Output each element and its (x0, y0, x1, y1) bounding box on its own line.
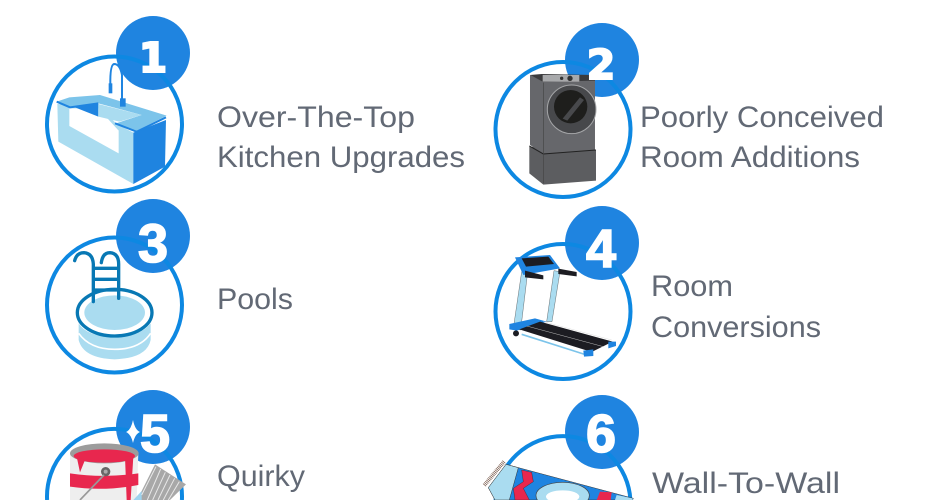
number badge 6 (565, 395, 639, 469)
label 1: Kitchen Upgrades (217, 141, 465, 174)
label 5: Quirky (217, 460, 305, 493)
ring 4 (496, 244, 630, 379)
numeral 1: 1 (139, 34, 167, 82)
item 5: quirky (47, 390, 305, 500)
icon: treadmill (509, 255, 616, 357)
number badge 1 (116, 16, 190, 90)
item 2: room additions (496, 23, 884, 197)
label 2 (640, 101, 884, 174)
ring 1 (47, 56, 182, 192)
icon: patterned rug (484, 462, 633, 500)
label 2: Room Additions (640, 141, 860, 174)
label 4: Room (651, 270, 733, 303)
ring 5 (47, 429, 182, 500)
icon: pool with ladder (75, 253, 152, 359)
numeral 5: 5 (140, 404, 170, 464)
label 1: Over-The-Top (217, 101, 415, 134)
item 3: pools (47, 199, 293, 372)
numeral 6: 6 (586, 404, 616, 464)
numeral 4: 4 (586, 219, 616, 279)
item 4: room conversions (496, 206, 821, 379)
ring 6 (496, 436, 630, 500)
icon: sparkle (126, 420, 140, 443)
label 6: Wall-To-Wall (652, 467, 840, 500)
ring 3 (47, 238, 182, 372)
numeral 2: 2 (587, 41, 615, 89)
icon: paint can and brush (70, 443, 186, 500)
icon: washer on pedestal (529, 74, 596, 185)
label 4: Conversions (651, 311, 821, 344)
label 4 (651, 270, 821, 344)
ring 2 (496, 62, 630, 197)
icon: kitchen sink (57, 64, 167, 184)
label 3: Pools (217, 283, 293, 316)
label 2: Poorly Conceived (640, 101, 884, 134)
number badge 3 (116, 199, 190, 273)
number badge 4 (565, 206, 639, 280)
number badge 5 (116, 390, 190, 464)
number badge 2 (565, 23, 639, 97)
item 1: kitchen upgrades (47, 16, 465, 192)
numeral 3: 3 (138, 214, 168, 274)
label 1 (217, 101, 465, 174)
item 6: wall-to-wall (484, 395, 840, 500)
